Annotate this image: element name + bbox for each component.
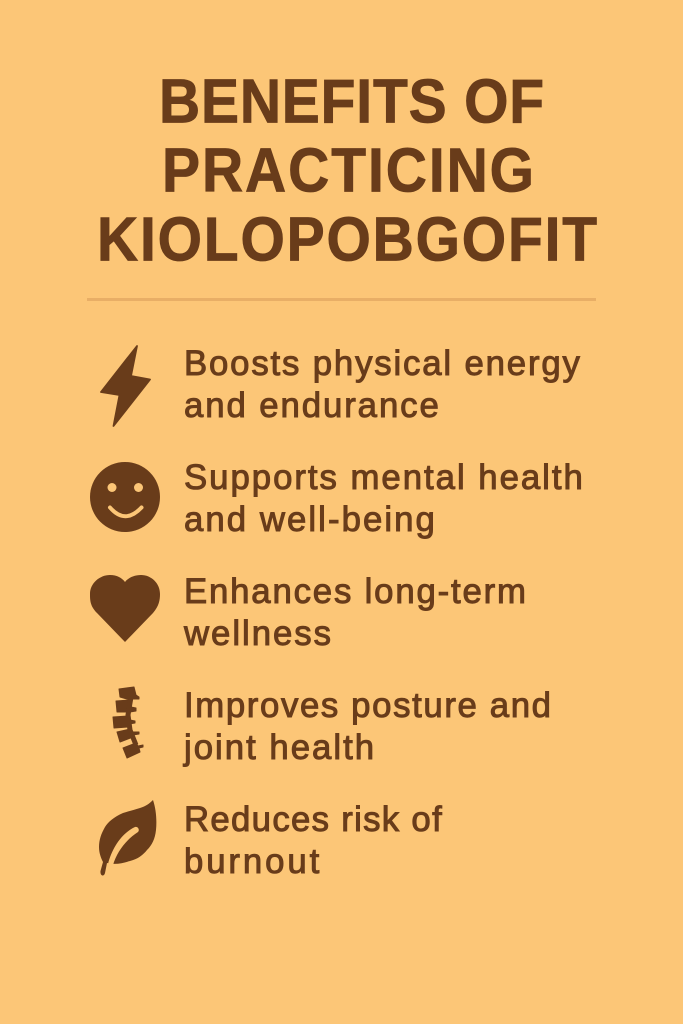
text: posture: joint health	[183, 728, 374, 767]
title: KIOLOPOBGOFIT	[97, 204, 597, 274]
title	[97, 66, 597, 274]
title: PRACTICING	[162, 135, 534, 205]
title: BENEFITS OF	[159, 66, 544, 136]
icon: spine	[113, 687, 143, 758]
text: burnout	[184, 800, 442, 881]
icon: smiling face	[90, 462, 160, 532]
benefit: mental health	[90, 458, 583, 539]
text: mental health	[184, 458, 583, 539]
text: burnout: burnout	[184, 842, 319, 881]
text: wellness	[183, 572, 526, 653]
text: mental health: and well-being	[184, 500, 435, 539]
icon: lightning bolt	[101, 346, 150, 426]
text: posture	[183, 686, 551, 767]
benefit: posture	[113, 686, 551, 767]
text: burnout: Reduces risk of	[184, 800, 442, 839]
benefit: energy	[101, 344, 580, 426]
text: energy: and endurance	[184, 386, 439, 425]
text: energy	[184, 344, 580, 425]
benefit: burnout	[99, 800, 442, 881]
icon: heart	[90, 575, 160, 642]
benefit: wellness	[90, 572, 526, 653]
text: posture: Improves posture and	[184, 686, 551, 725]
text: wellness: wellness	[183, 614, 331, 653]
text: wellness: Enhances long-term	[184, 572, 526, 611]
icon: leaf	[99, 800, 156, 875]
text: energy: Boosts physical energy	[184, 344, 580, 383]
text: mental health: Supports mental health	[184, 458, 583, 497]
